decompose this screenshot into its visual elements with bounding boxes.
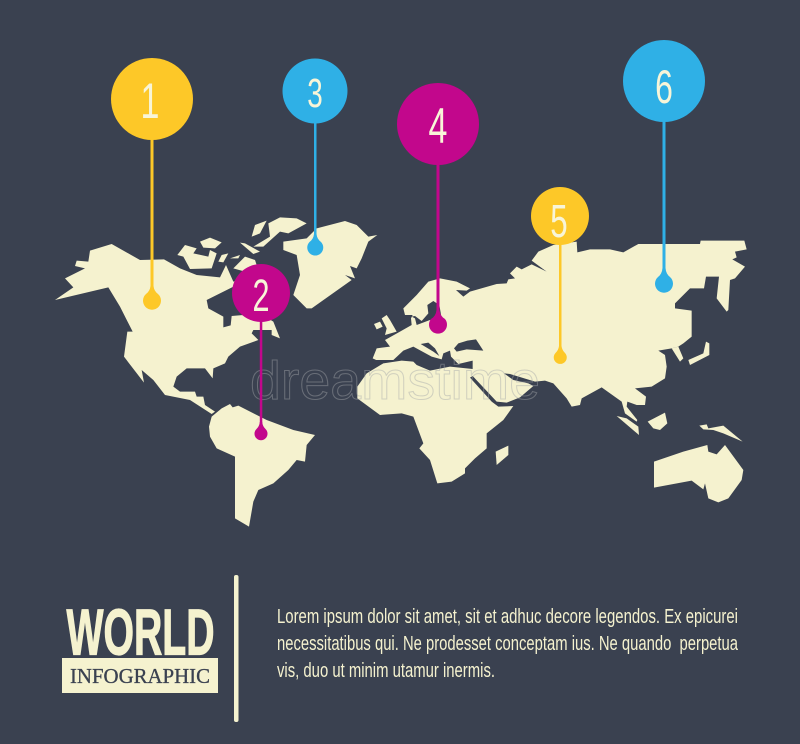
world map: [55, 217, 747, 527]
North America: [55, 244, 280, 414]
Australia: [654, 445, 743, 502]
pin 4: magenta marker: [397, 83, 479, 334]
pin 5: yellow marker: [531, 187, 589, 364]
body text: vis, duo ut minim utamur inermis.: [277, 660, 495, 682]
Great Britain: [382, 315, 397, 335]
South America: [209, 404, 315, 527]
Arctic islands: [177, 217, 307, 272]
pin 6: blue marker: [623, 40, 705, 293]
Madagascar: [496, 446, 508, 465]
Japan: [688, 342, 709, 365]
subtitle box: INFOGRAPHIC: [62, 658, 218, 693]
pin 1: yellow marker: [111, 58, 193, 310]
divider: [234, 575, 238, 722]
Sumatra: [617, 416, 639, 435]
pin 5: yellow marker: 5: [550, 196, 568, 248]
pin 6: blue marker: 6: [655, 61, 673, 114]
pin 3: blue marker: [282, 58, 348, 256]
New Guinea: [699, 424, 743, 442]
map: the Americas and Greenland: [55, 217, 377, 527]
Baltic Sea: [412, 301, 442, 325]
Borneo: [648, 413, 667, 430]
Eurasia and Africa: [357, 241, 747, 483]
title: WORLD: WORLD: [66, 596, 214, 668]
body text: [277, 606, 739, 682]
pin 1: yellow marker: 1: [141, 74, 159, 130]
watermark: dreamstime: [250, 351, 540, 411]
Adriatic Sea: [421, 343, 439, 356]
pin 2: magenta marker: 2: [252, 271, 270, 322]
pin 2: magenta marker: [232, 264, 290, 440]
subtitle box: INFOGRAPHIC: INFOGRAPHIC: [70, 664, 210, 688]
Black Sea: [454, 339, 483, 352]
map: Europe, Asia, Africa and Australia: [357, 241, 747, 502]
Mediterranean Sea: [370, 347, 473, 371]
pin 4: magenta marker: 4: [429, 99, 447, 155]
Greenland: [283, 221, 377, 308]
Ireland: [374, 322, 383, 329]
pin 3: blue marker: 3: [307, 71, 323, 116]
Korea strip: [672, 347, 683, 362]
Hudson Bay: [207, 283, 253, 327]
